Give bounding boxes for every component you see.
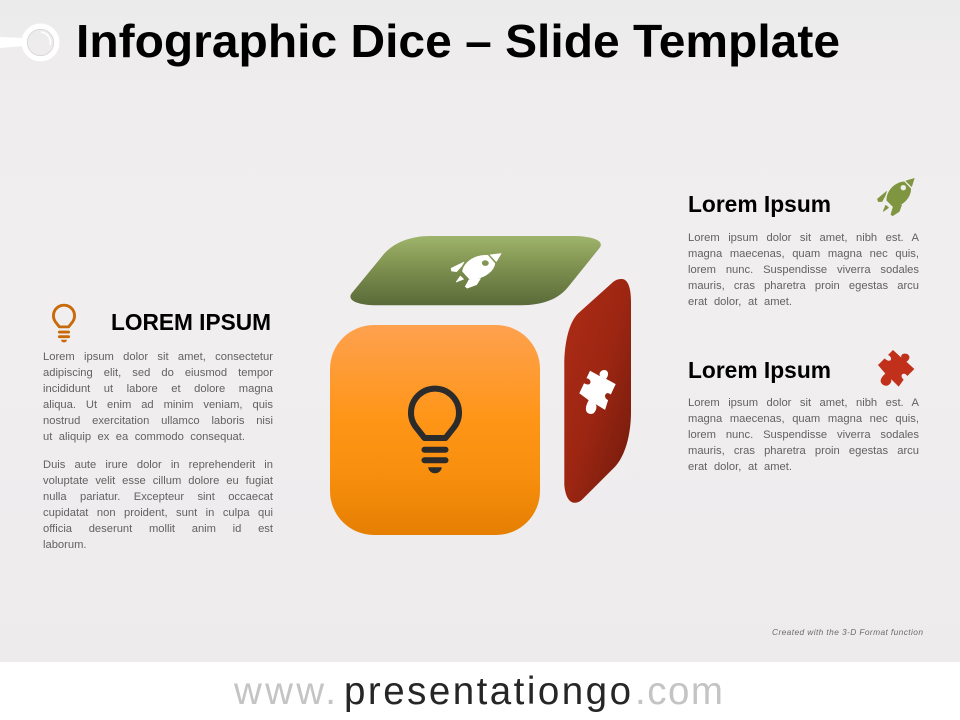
dice: right red face: [564, 279, 631, 503]
text block: left paragraph 2: Duis aute irure dolor in reprehenderit in: [43, 459, 273, 471]
caption: created with: Created with the 3-D Format function: [772, 627, 923, 637]
text block: left paragraph 1: [43, 351, 273, 443]
text block: left paragraph 2: voluptate velit esse cillum dolore eu fugiat: [43, 475, 273, 487]
text block: right top: Lorem ipsum dolor sit amet, nibh est. A: [688, 232, 919, 244]
text block: left paragraph 1: incididunt ut labore et dolore magna: [43, 383, 273, 395]
title: Infographic Dice – Slide Template: [76, 15, 840, 67]
text block: right bottom: [688, 397, 919, 473]
text block: right top: erat dolor, at amet.: [688, 296, 792, 308]
icon: magnifier logo: [0, 26, 57, 59]
icon: orange light bulb: [53, 305, 75, 342]
footer url: .com: [635, 670, 723, 713]
text block: right top: mauris, cras pharetra proin egestas arcu: [688, 280, 919, 292]
footer url: www.: [233, 670, 336, 713]
dice: front orange face: [330, 325, 540, 535]
text block: right bottom: mauris, cras pharetra proin egestas arcu: [688, 445, 919, 457]
footer url: [233, 670, 723, 713]
text block: left paragraph 2: cupidatat non proident, sunt in culpa qui: [43, 507, 273, 519]
text block: left paragraph 2: officia deserunt mollit anim id est: [43, 523, 273, 535]
text block: right top: [688, 232, 919, 308]
text block: right bottom: erat dolor, at amet.: [688, 461, 792, 473]
icon: dark light bulb: [411, 389, 459, 473]
text block: right top: magna maecenas, quam magna nec quis,: [688, 248, 919, 260]
heading: left: LOREM IPSUM: [111, 309, 271, 335]
text block: left paragraph 1: aliqua. Ut enim ad minim veniam, quis: [43, 399, 273, 411]
text block: left paragraph 2: [43, 459, 273, 551]
dice: top green face: [350, 236, 601, 305]
text block: right bottom: lorem nunc. Suspendisse viverra sodales: [688, 429, 919, 441]
text block: left paragraph 1: adipiscing elit, sed do eiusmod tempor: [43, 367, 273, 379]
footer band: [0, 662, 960, 720]
text block: right bottom: magna maecenas, quam magna nec quis,: [688, 413, 919, 425]
heading: right bottom: Lorem Ipsum: [688, 357, 831, 383]
text block: right bottom: Lorem ipsum dolor sit amet, nibh est. A: [688, 397, 919, 409]
footer url: presentationgo: [344, 670, 631, 713]
icon: green rocket: [878, 178, 914, 216]
text block: left paragraph 1: ut aliquip ex ea commodo consequat.: [43, 431, 245, 443]
heading: right top: Lorem Ipsum: [688, 191, 831, 217]
text block: left paragraph 1: Lorem ipsum dolor sit amet, consectetur: [43, 351, 273, 363]
text block: left paragraph 2: nulla pariatur. Excepteur sint occaecat: [43, 491, 273, 503]
text block: left paragraph 1: nostrud exercitation ullamco laboris nisi: [43, 415, 273, 427]
icon: red puzzle piece: [878, 350, 914, 387]
icon: white puzzle piece: [575, 363, 620, 418]
text block: right top: lorem nunc. Suspendisse viverra sodales: [688, 264, 919, 276]
icon: white rocket: [448, 247, 501, 292]
text block: left paragraph 2: laborum.: [43, 539, 87, 551]
